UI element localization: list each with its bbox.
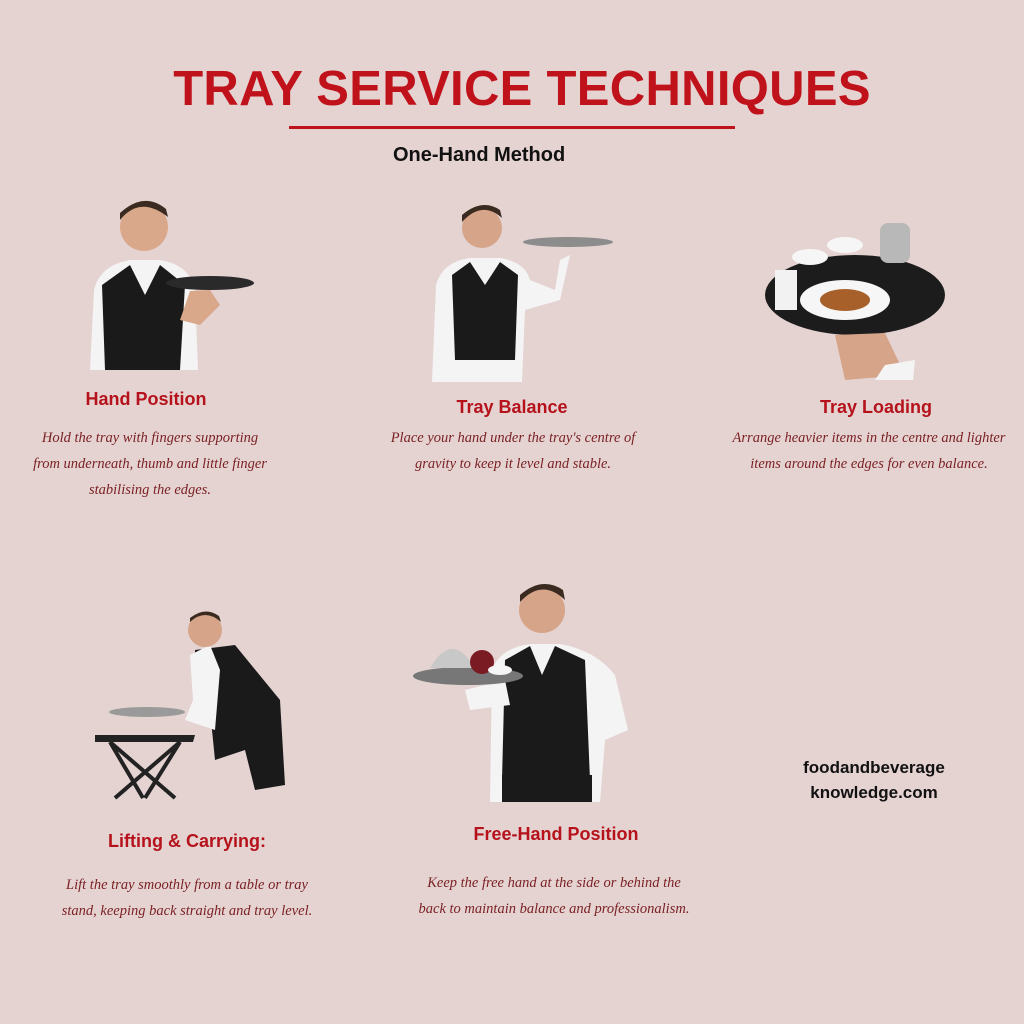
heading: hand position: Hand Position — [86, 389, 206, 409]
title underline — [289, 126, 735, 129]
illustration: hand position waiter — [90, 200, 254, 370]
title: TRAY SERVICE TECHNIQUES — [173, 62, 871, 116]
illustration: loaded tray — [765, 223, 945, 380]
heading: free-hand position: Free-Hand Position — [473, 824, 638, 844]
heading: tray balance: Tray Balance — [456, 397, 568, 417]
subtitle: One-Hand Method — [393, 144, 565, 166]
text: lifting & carrying: Lift the tray smoothly from a table or tray stand, keeping back straight and tray level. — [62, 877, 312, 919]
illustration: free-hand waiter — [413, 584, 628, 802]
heading: lifting & carrying: Lifting & Carrying: — [108, 831, 266, 851]
text: tray loading: Arrange heavier items in the centre and lighter items around the edges for even balance. — [733, 430, 1005, 472]
illustration: tray balance waiter — [432, 205, 613, 382]
text: hand position: Hold the tray with fingers supporting from underneath, thumb and little finger stabilising the edges. — [33, 430, 267, 498]
heading: tray loading: Tray Loading — [820, 397, 932, 417]
text: free-hand position: Keep the free hand at the side or behind the back to maintain balance and professionalism. — [419, 875, 689, 917]
website credit: knowledge.com — [810, 783, 938, 802]
website credit: foodandbeverage — [803, 758, 945, 777]
text: tray balance: Place your hand under the tray's centre of gravity to keep it level and stable. — [391, 430, 635, 472]
website credit — [803, 758, 945, 802]
illustration: lifting waiter — [95, 612, 285, 800]
